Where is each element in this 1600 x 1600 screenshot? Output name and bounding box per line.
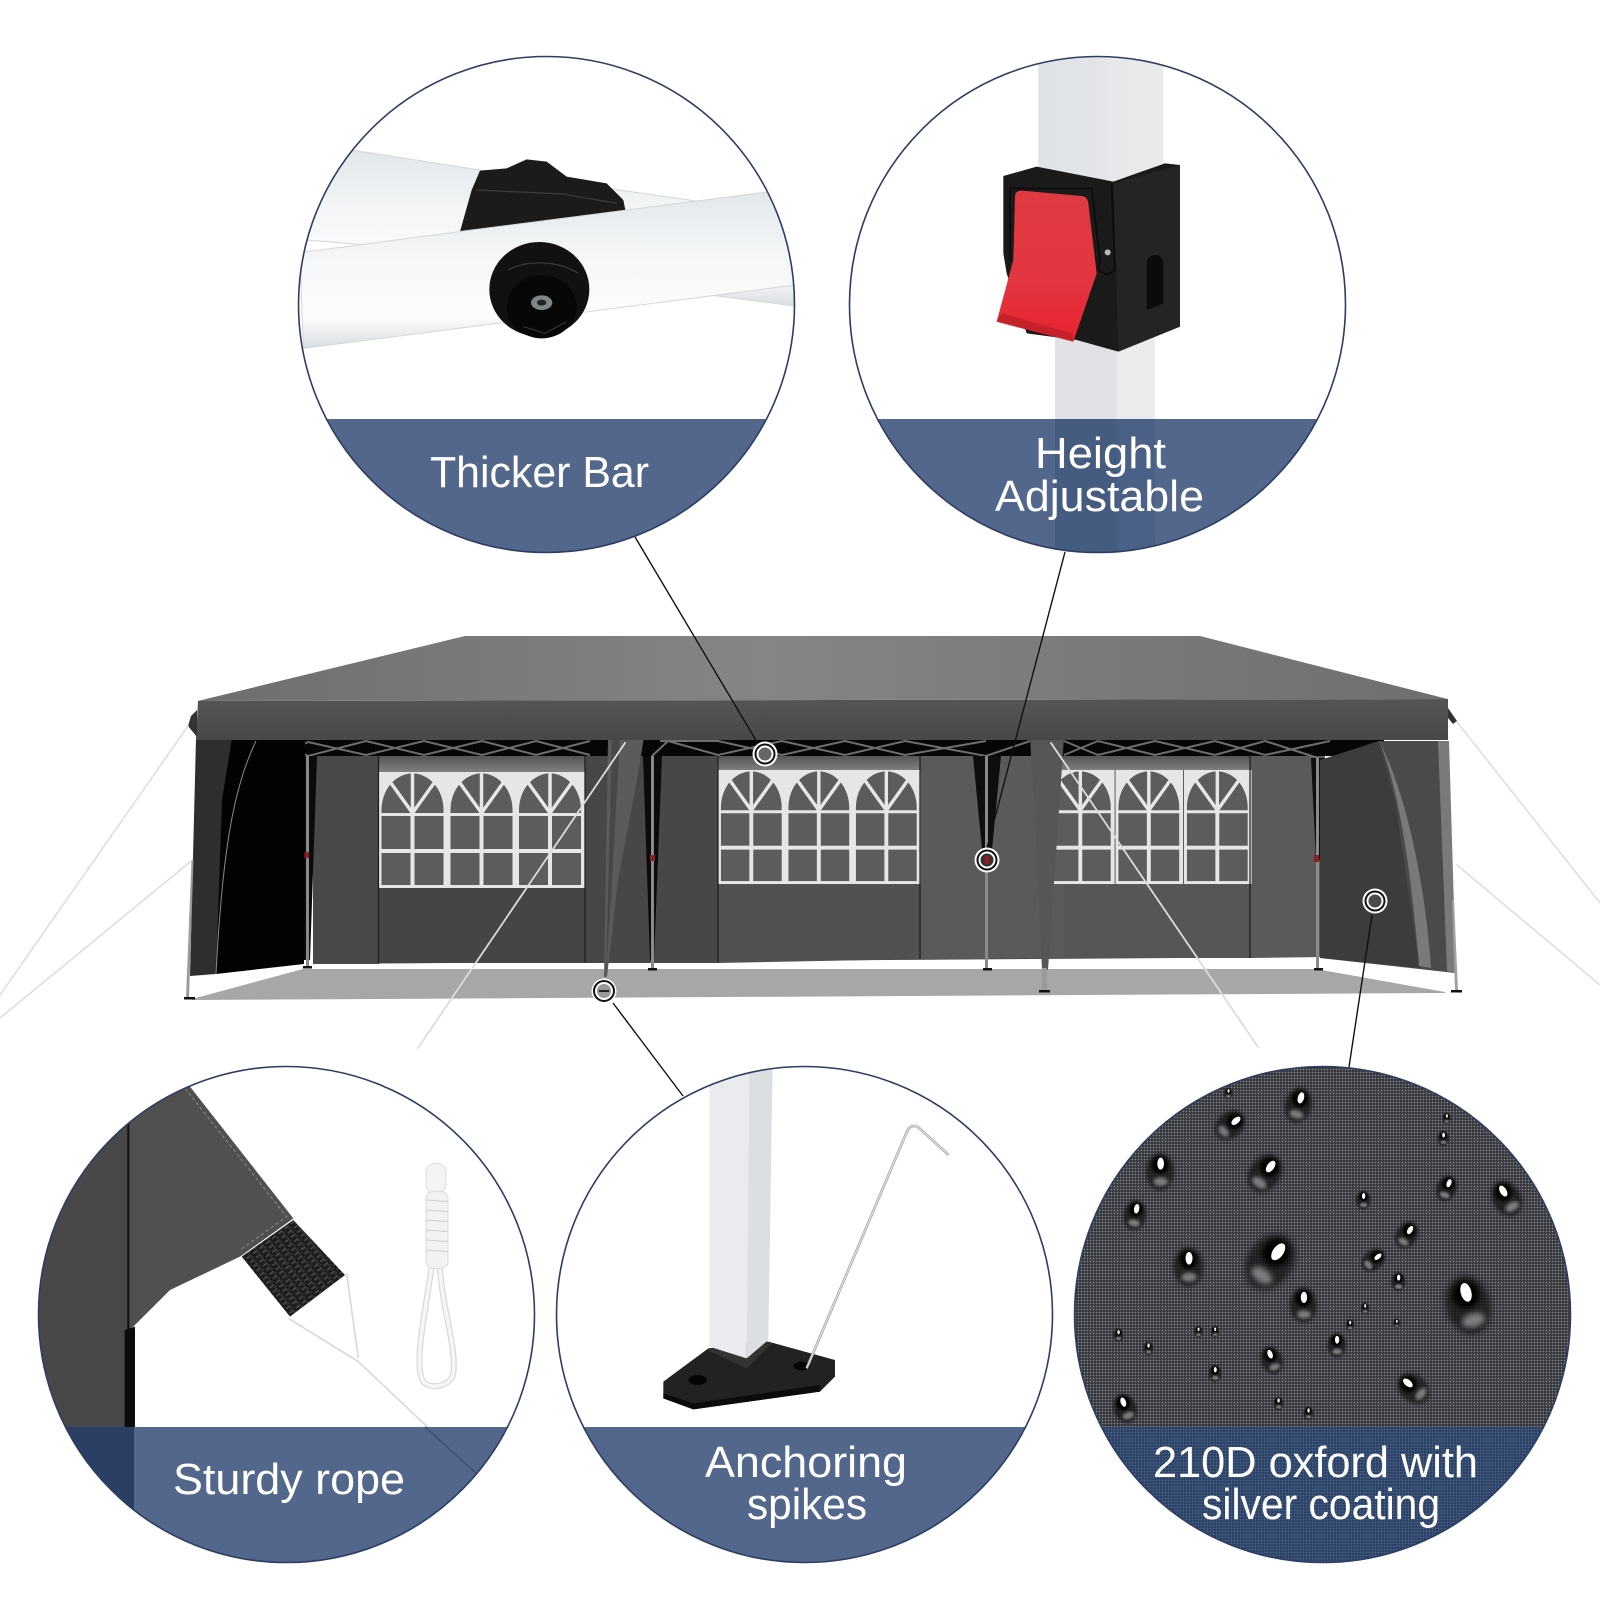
back wall xyxy=(313,756,1325,964)
hotspot: oxford fabric xyxy=(1362,888,1388,914)
label: spikes xyxy=(747,1480,867,1529)
circle outline xyxy=(1074,1066,1570,1562)
callout line: thicker bar xyxy=(635,537,757,742)
corner tabs xyxy=(188,708,1457,737)
icon: crossing white bars with black joint xyxy=(300,149,800,348)
hotspot: height adjustable xyxy=(974,848,1000,872)
panel: 210D oxford xyxy=(1070,1060,1580,1570)
label band xyxy=(584,1427,1024,1562)
panel: height adjustable xyxy=(840,53,1360,559)
circle outline xyxy=(850,56,1346,552)
panel: sturdy rope xyxy=(30,1060,550,1580)
label xyxy=(1153,1438,1478,1529)
rear poles xyxy=(301,756,1325,970)
panel: thicker bar xyxy=(290,56,810,559)
tent product photo xyxy=(0,636,1600,1048)
callout line: oxford fabric xyxy=(1349,915,1372,1067)
circle outline xyxy=(556,1066,1052,1562)
label: Anchoring xyxy=(705,1438,907,1487)
label: silver coating xyxy=(1202,1480,1440,1529)
window left xyxy=(378,772,585,888)
window right xyxy=(1047,770,1252,884)
ground shadow xyxy=(192,969,1445,1000)
roof frame truss xyxy=(214,738,1384,758)
icon: pole with red lock xyxy=(996,57,1180,419)
left side wall xyxy=(184,738,305,1000)
label xyxy=(995,429,1204,521)
callout line: anchoring spikes xyxy=(613,1003,683,1096)
valance xyxy=(196,699,1448,740)
label: Height xyxy=(1035,429,1166,478)
label: Thicker Bar xyxy=(430,448,649,497)
circle outline xyxy=(298,56,794,552)
front corner panels xyxy=(604,737,1064,992)
icon: fabric corner, strap and rope coil xyxy=(39,1086,457,1427)
guy ropes xyxy=(0,722,1600,1048)
hotspot: thicker bar xyxy=(752,742,778,766)
circle outline xyxy=(38,1066,534,1562)
window center xyxy=(718,770,921,884)
roof xyxy=(198,636,1448,701)
right side wall xyxy=(1320,741,1462,992)
label: Adjustable xyxy=(995,472,1204,521)
label band xyxy=(878,419,1316,548)
icon: water droplets xyxy=(1109,1084,1528,1426)
icon: pole foot and stake xyxy=(663,1063,949,1409)
panel: anchoring spikes xyxy=(550,1063,1070,1567)
label band xyxy=(328,419,766,552)
label: 210D oxford with xyxy=(1153,1438,1478,1487)
label band xyxy=(1102,1427,1542,1562)
panel seams xyxy=(378,756,1250,963)
callout line: height adjustable xyxy=(987,552,1065,848)
label band xyxy=(134,1427,506,1562)
label: Sturdy rope xyxy=(173,1455,405,1504)
label xyxy=(705,1438,907,1529)
fabric texture xyxy=(1075,1067,1570,1427)
hotspot: anchoring spikes xyxy=(592,978,616,1004)
